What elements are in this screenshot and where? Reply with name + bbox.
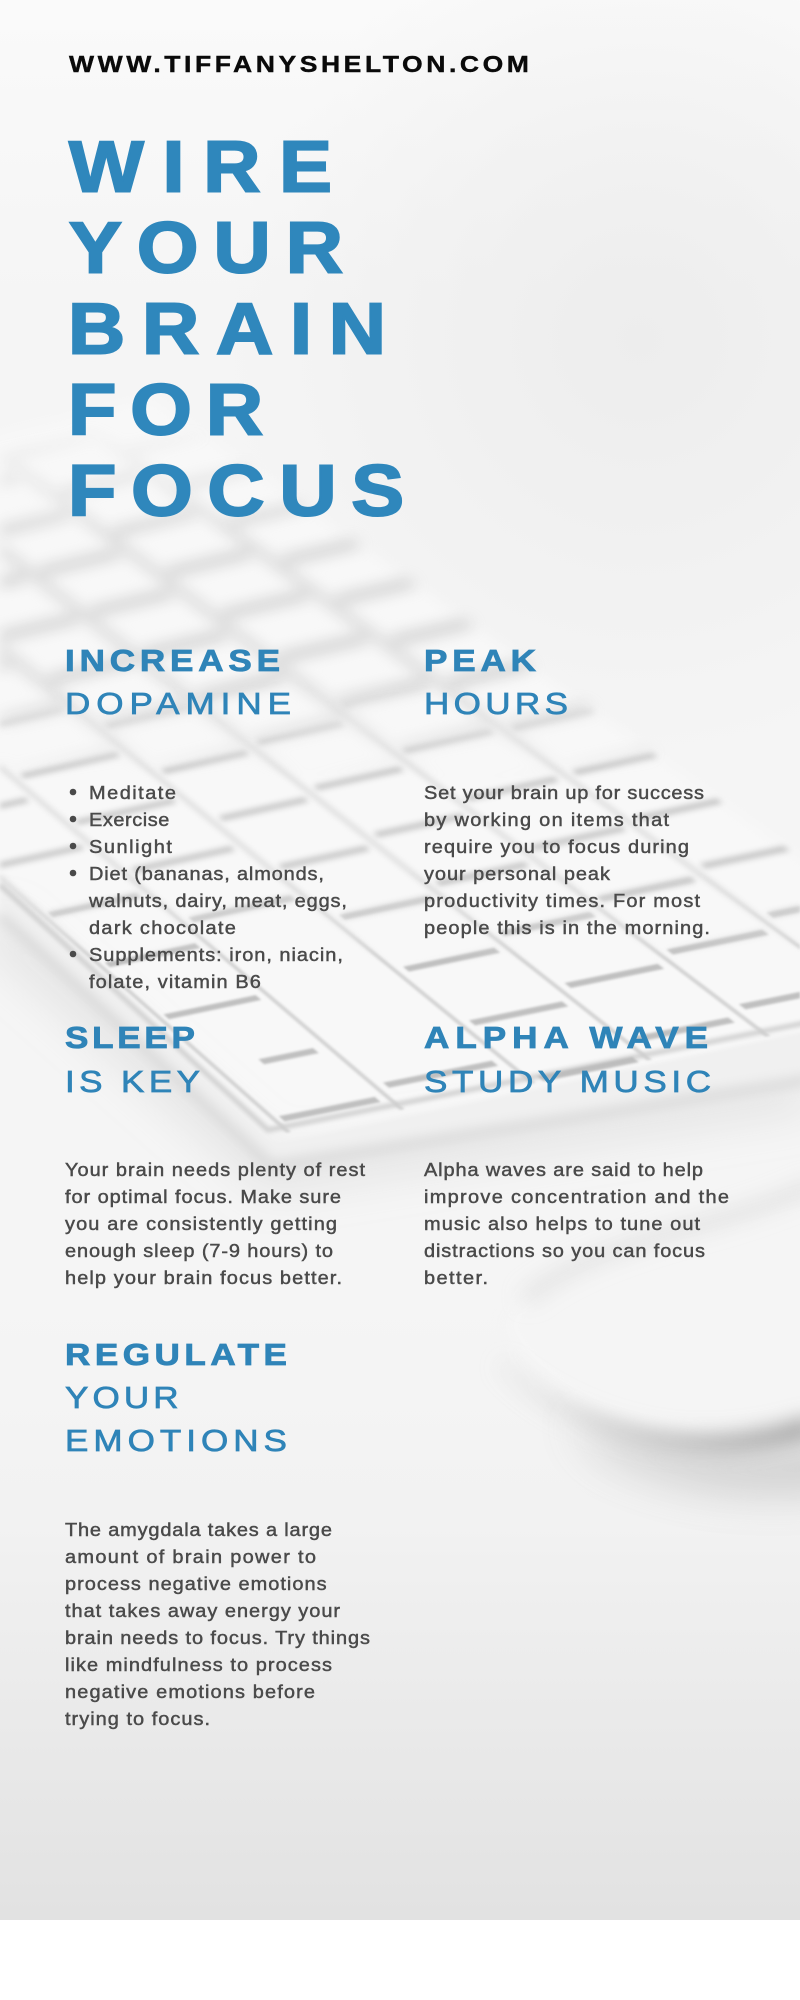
panel: regulate your emotions <box>65 1337 370 1730</box>
keyboard middle rows, soft blur <box>0 708 800 934</box>
text: alpha wave body <box>424 1161 729 1289</box>
heading: sleep is key <box>65 1020 200 1098</box>
bullet list: Meditate <box>89 784 176 804</box>
text: regulate body: brain needs to focus. Try things <box>65 1629 370 1649</box>
title: FOCUS <box>68 451 404 532</box>
text: peak hours body <box>424 784 710 939</box>
heading: sleep is key: SLEEP <box>65 1020 195 1054</box>
text: regulate body: amount of brain power to <box>65 1548 316 1568</box>
text: regulate body <box>65 1521 370 1730</box>
text: peak hours body: by working on items that <box>424 811 670 831</box>
title <box>68 127 404 532</box>
text: regulate body: trying to focus. <box>65 1710 210 1730</box>
heading: peak hours: PEAK <box>424 643 536 677</box>
heading: alpha wave study music: ALPHA WAVE <box>424 1020 708 1054</box>
heading: peak hours: HOURS <box>424 686 568 720</box>
title: FOR <box>68 370 263 451</box>
heading: regulate your emotions: REGULATE <box>65 1337 287 1371</box>
heading: alpha wave study music: STUDY MUSIC <box>424 1064 711 1098</box>
heading: increase dopamine: INCREASE <box>65 643 280 677</box>
text: sleep body: for optimal focus. Make sure <box>65 1188 341 1208</box>
text: regulate body: that takes away energy your <box>65 1602 341 1622</box>
heading: increase dopamine <box>65 643 291 720</box>
text: peak hours body: productivity times. For most <box>424 892 701 912</box>
bullet list: Exercise <box>89 811 169 831</box>
text: peak hours body: Set your brain up for success <box>424 784 704 804</box>
text: peak hours body: require you to focus during <box>424 838 689 858</box>
keyboard near rows, in focus <box>26 893 800 1133</box>
text: sleep body <box>65 1161 366 1289</box>
bullet dots <box>70 789 76 957</box>
text: alpha wave body: better. <box>424 1269 488 1289</box>
text: alpha wave body: distractions so you can focus <box>424 1242 705 1262</box>
title: YOUR <box>69 208 343 289</box>
heading: alpha wave study music <box>424 1020 711 1098</box>
text: sleep body: enough sleep (7-9 hours) to <box>65 1242 333 1262</box>
text: sleep body: help your brain focus better. <box>65 1269 342 1289</box>
text: regulate body: negative emotions before <box>65 1683 315 1703</box>
heading: sleep is key: IS KEY <box>65 1064 200 1098</box>
text: peak hours body: people this is in the morning. <box>424 919 710 939</box>
text: regulate body: like mindfulness to process <box>65 1656 332 1676</box>
title: BRAIN <box>68 289 386 370</box>
text: alpha wave body: Alpha waves are said to help <box>424 1161 703 1181</box>
bullet list: Supplements: iron, niacin, <box>89 946 343 966</box>
bullet list: walnuts, dairy, meat, eggs, <box>88 892 347 912</box>
panel: sleep is key <box>65 1020 366 1289</box>
text: sleep body: Your brain needs plenty of rest <box>65 1161 366 1181</box>
heading: regulate your emotions: YOUR <box>65 1380 179 1414</box>
heading: increase dopamine: DOPAMINE <box>65 686 291 720</box>
panel: increase dopamine <box>65 643 347 993</box>
text: sleep body: you are consistently getting <box>65 1215 337 1235</box>
panel: alpha wave study music <box>424 1020 729 1289</box>
website url: WWW.TIFFANYSHELTON.COM <box>69 51 529 78</box>
title: WIRE <box>69 127 332 208</box>
heading: regulate your emotions <box>65 1337 287 1457</box>
text: alpha wave body: music also helps to tune out <box>424 1215 701 1235</box>
bullet list: folate, vitamin B6 <box>89 973 261 993</box>
heading: regulate your emotions: EMOTIONS <box>65 1423 287 1457</box>
text: peak hours body: your personal peak <box>424 865 610 885</box>
bullet list <box>88 784 347 993</box>
text: regulate body: process negative emotions <box>65 1575 327 1595</box>
bullet list: Sunlight <box>89 838 173 858</box>
text: alpha wave body: improve concentration and the <box>424 1188 729 1208</box>
panel: peak hours <box>424 643 710 939</box>
keyboard far rows, heavily blurred <box>0 464 588 748</box>
text: regulate body: The amygdala takes a large <box>65 1521 332 1541</box>
bullet list: Diet (bananas, almonds, <box>89 865 324 885</box>
heading: peak hours <box>424 643 568 720</box>
bullet list: dark chocolate <box>89 919 236 939</box>
